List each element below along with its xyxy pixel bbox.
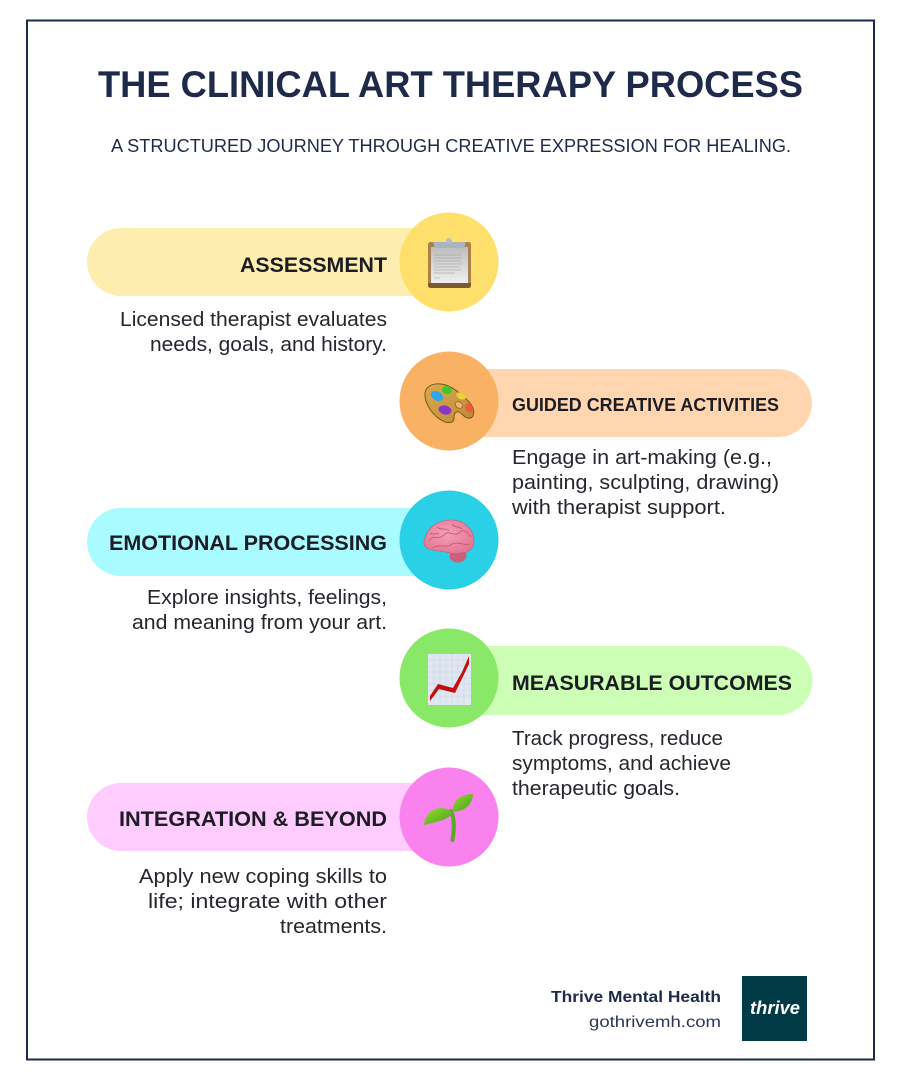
activities circle <box>400 352 498 450</box>
footer brand <box>551 976 807 1041</box>
processing pill <box>87 508 440 576</box>
step 5: integration and beyond <box>87 768 498 938</box>
outcomes description <box>512 728 731 800</box>
step 4: measurable outcomes <box>400 628 813 800</box>
icon: rising chart <box>428 654 471 705</box>
assessment description: needs, goals, and history. <box>150 334 387 356</box>
brand logo <box>742 976 807 1041</box>
assessment description: Licensed therapist evaluates <box>120 309 387 331</box>
activities pill <box>460 369 812 437</box>
step 3: emotional processing <box>87 490 498 634</box>
assessment pill <box>87 228 440 296</box>
integration description: life; integrate with other <box>148 891 387 913</box>
activities heading: GUIDED CREATIVE ACTIVITIES <box>512 395 779 415</box>
processing heading: EMOTIONAL PROCESSING <box>109 532 387 555</box>
activities description <box>511 447 779 519</box>
integration description: treatments. <box>280 916 387 938</box>
step 1: assessment <box>87 212 499 356</box>
assessment description <box>120 309 387 356</box>
icon: sprout <box>424 794 473 840</box>
outcomes heading: MEASURABLE OUTCOMES <box>512 672 792 695</box>
outcomes description: Track progress, reduce <box>512 728 723 750</box>
processing description <box>132 587 387 634</box>
icon: clipboard <box>428 238 471 288</box>
activities description: with therapist support. <box>511 497 726 519</box>
brand name: Thrive Mental Health <box>551 989 721 1006</box>
outcomes pill <box>460 646 813 715</box>
assessment heading: ASSESSMENT <box>240 254 387 277</box>
processing description: Explore insights, feelings, <box>147 587 387 609</box>
title: THE CLINICAL ART THERAPY PROCESS <box>98 64 803 105</box>
integration circle <box>400 768 498 866</box>
step 2: guided creative activities <box>400 352 812 519</box>
processing circle <box>400 490 498 590</box>
brand url: gothrivemh.com <box>589 1014 721 1031</box>
integration description <box>139 866 387 938</box>
integration description: Apply new coping skills to <box>139 866 387 888</box>
integration heading: INTEGRATION & BEYOND <box>119 808 387 831</box>
outcomes description: therapeutic goals. <box>512 778 680 800</box>
icon: palette <box>425 384 475 423</box>
brand logo: thrive <box>750 998 800 1018</box>
assessment circle <box>400 212 498 312</box>
activities description: painting, sculpting, drawing) <box>512 472 779 494</box>
activities description: Engage in art-making (e.g., <box>512 447 772 469</box>
processing description: and meaning from your art. <box>132 612 387 634</box>
subtitle: A STRUCTURED JOURNEY THROUGH CREATIVE EXPRESSION FOR HEALING. <box>111 136 791 156</box>
integration pill <box>87 783 440 851</box>
icon: brain <box>424 520 474 562</box>
outcomes circle <box>400 628 498 728</box>
outcomes description: symptoms, and achieve <box>512 753 731 775</box>
